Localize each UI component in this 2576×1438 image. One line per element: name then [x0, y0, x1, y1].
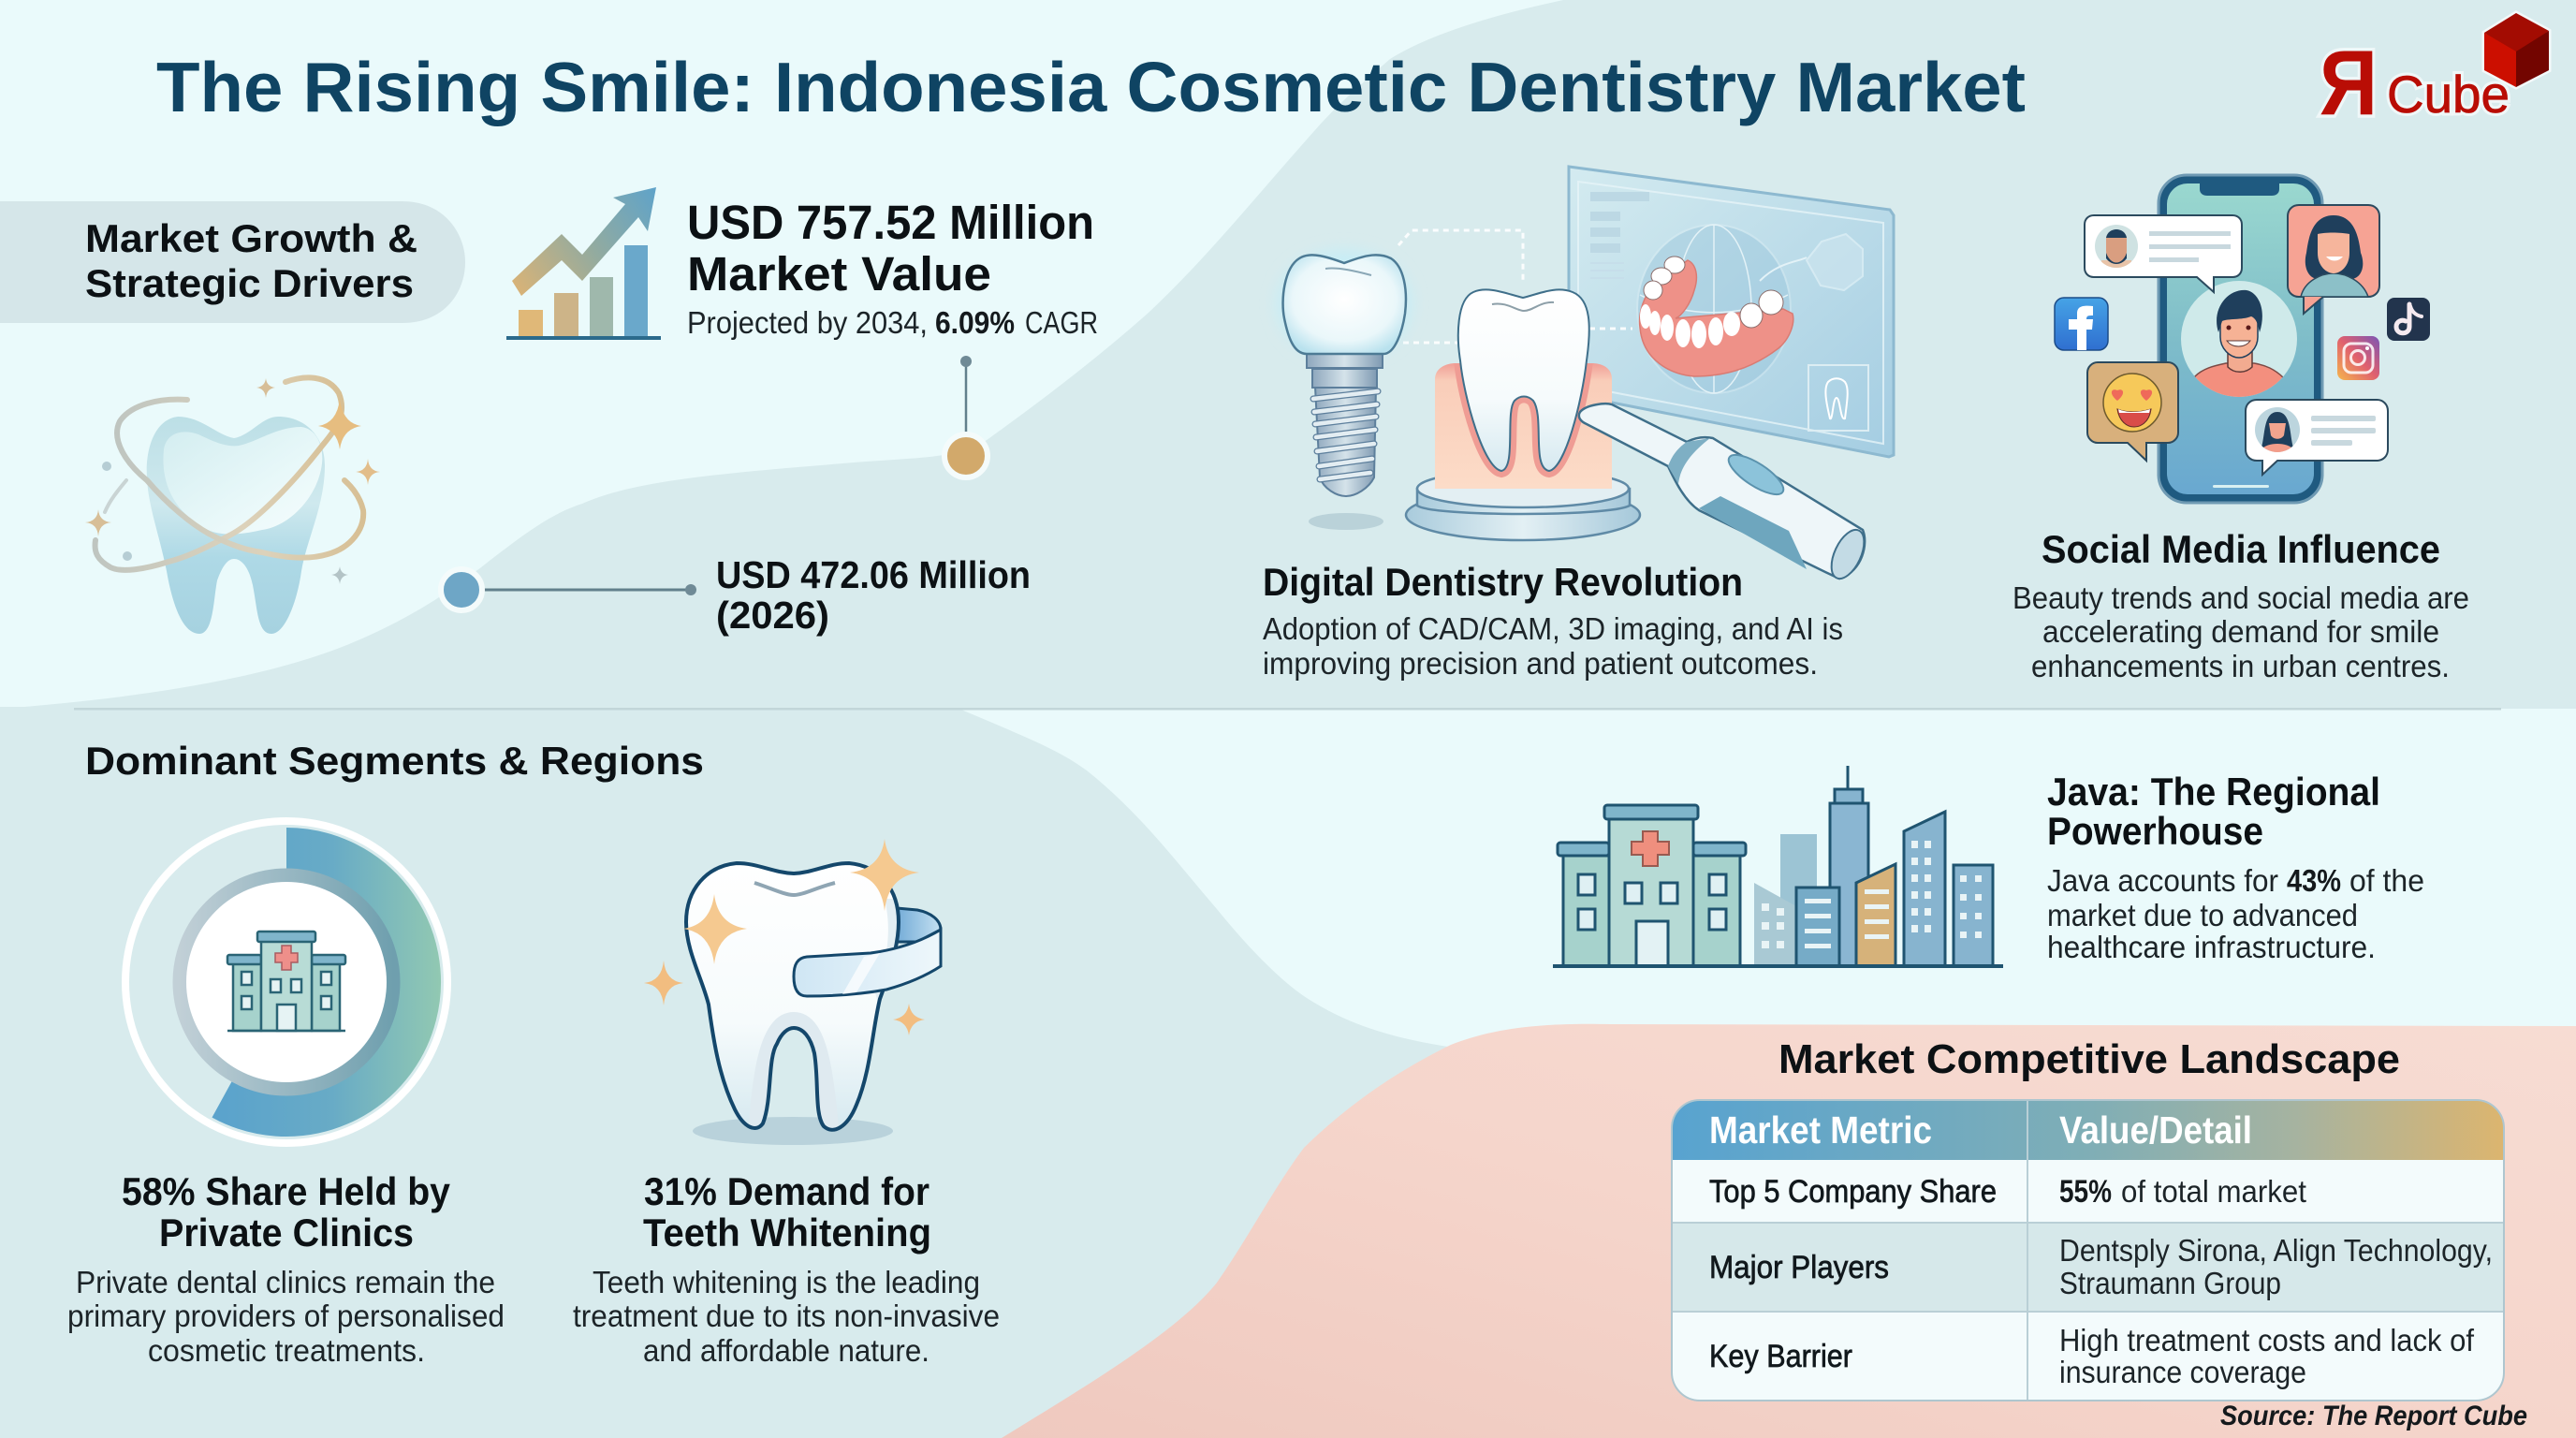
heading: java the regional powerhouse: Powerhouse [2047, 809, 2263, 853]
heading: digital dentistry revolution: Digital Dentistry Revolution [1263, 560, 1743, 604]
heading pill: market growth and strategic drivers: Strategic Drivers [85, 261, 414, 305]
text: java description: 43% [2287, 863, 2341, 898]
text: java description [2047, 863, 2424, 964]
panel: digital dentistry revolution [1263, 167, 1894, 681]
text: digital dentistry description: Adoption of CAD/CAM, 3D imaging, and AI is [1263, 611, 1843, 646]
chat bubble: man [2085, 215, 2242, 292]
connector: 2034 marker [944, 356, 988, 477]
panel: java regional powerhouse [1553, 766, 2424, 966]
icon: growth bar chart with arrow [506, 187, 661, 340]
panel: social media influence [2012, 175, 2469, 683]
row: major players: Dentsply Sirona, Align Technology, [2059, 1233, 2493, 1268]
icon: hospital [227, 932, 345, 1031]
table header: Value/Detail [2059, 1108, 2252, 1152]
stat heading: 58 percent share: 58% Share Held by [122, 1169, 451, 1213]
panel: private clinics share [67, 821, 505, 1368]
logo: RCube [2320, 13, 2549, 134]
text: java description: Java accounts for [2047, 863, 2278, 898]
panel: market growth and value [0, 187, 1098, 637]
text: private clinics description: primary providers of personalised [67, 1299, 505, 1333]
row: key barrier: Key Barrier [1709, 1339, 1852, 1374]
chat bubble: heart eyes emoji [2087, 362, 2178, 461]
heading: social media influence: Social Media Influence [2042, 527, 2440, 571]
stat: USD 757.52 million market value: 6.09% [935, 305, 1015, 340]
text: teeth whitening description: treatment due to its non-invasive [573, 1299, 1000, 1333]
panel: market competitive landscape [1672, 1036, 2504, 1401]
text: teeth whitening description: and affordable nature. [643, 1333, 929, 1368]
stat heading: 31 percent demand: Teeth Whitening [643, 1211, 931, 1255]
table header [1709, 1108, 2252, 1152]
row: key barrier: High treatment costs and lack of [2059, 1323, 2475, 1357]
avatar: smiling man [2181, 281, 2297, 403]
stat: USD 472.06 million 2026: (2026) [716, 594, 829, 637]
row: key barrier [1709, 1323, 2475, 1389]
stat: USD 757.52 million market value: Projected by 2034, [687, 305, 928, 340]
stat heading: 58 percent share [122, 1169, 451, 1255]
text: digital dentistry description [1263, 611, 1843, 681]
icon: facebook [2055, 298, 2108, 350]
text: social media description: enhancements in urban centres. [2031, 649, 2450, 683]
phone [2159, 175, 2322, 503]
heading pill: market growth and strategic drivers: Market Growth & [85, 216, 417, 260]
text: social media description [2012, 580, 2469, 683]
panel: teeth whitening demand [573, 839, 1000, 1368]
row: major players: Straumann Group [2059, 1266, 2281, 1300]
text: private clinics description: cosmetic treatments. [148, 1333, 425, 1368]
row: top 5 company share: 55% [2059, 1174, 2112, 1210]
text: social media description: Beauty trends and social media are [2012, 580, 2469, 615]
text: teeth whitening description: Teeth whitening is the leading [593, 1265, 980, 1299]
implant [1277, 250, 1412, 530]
heading: java the regional powerhouse [2047, 770, 2380, 853]
heading: market competitive landscape: Market Competitive Landscape [1778, 1036, 2400, 1082]
stat: USD 472.06 million 2026 [716, 553, 1031, 637]
logo: RCube: Cube [2387, 65, 2510, 124]
screen with dental scan [1569, 167, 1894, 457]
connector: 2026 marker [441, 569, 696, 610]
stat: USD 757.52 million market value: CAGR [1025, 305, 1098, 340]
row: major players: Major Players [1709, 1250, 1889, 1285]
chat bubble: woman card [2288, 205, 2379, 314]
icon: hospital and city skyline [1553, 766, 2003, 966]
table: market metrics [1672, 1100, 2504, 1401]
text: java description: market due to advanced [2047, 898, 2358, 932]
heading pill: market growth and strategic drivers [0, 201, 465, 323]
logo: RCube: Я [2320, 31, 2378, 134]
heading: java the regional powerhouse: Java: The Regional [2047, 770, 2380, 814]
stat: USD 757.52 million market value [687, 196, 1098, 340]
text: digital dentistry description: improving precision and patient outcomes. [1263, 646, 1818, 681]
text: java description: healthcare infrastructure. [2047, 930, 2376, 964]
illustration: phone with social media [2055, 175, 2430, 503]
tooth on platform [1406, 289, 1640, 540]
stat heading: 31 percent demand: 31% Demand for [644, 1169, 929, 1213]
logo: RCube: Cube [2387, 65, 2510, 124]
text: private clinics description [67, 1265, 505, 1368]
row: key barrier: insurance coverage [2059, 1355, 2306, 1389]
row: major players [1709, 1233, 2493, 1300]
row: top 5 company share: of total market [2121, 1174, 2306, 1209]
text: java description: of the [2349, 863, 2424, 898]
title: The Rising Smile: Indonesia Cosmetic Dentistry Market [156, 48, 2026, 126]
icon: instagram [2337, 336, 2379, 380]
source credit: Source: The Report Cube [2220, 1401, 2527, 1431]
icon: tiktok [2387, 298, 2430, 341]
stat: USD 757.52 million market value: Market Value [687, 247, 991, 301]
text: social media description: accelerating demand for smile [2042, 614, 2439, 649]
table header: Market Metric [1709, 1108, 1932, 1152]
stat: USD 757.52 million market value: USD 757.52 Million [687, 196, 1094, 249]
stat heading: 58 percent share: Private Clinics [159, 1211, 414, 1255]
heading: dominant segments and regions: Dominant Segments & Regions [85, 739, 704, 783]
icon: tooth with whitening strip [644, 839, 941, 1145]
text: private clinics description: Private dental clinics remain the [76, 1265, 495, 1299]
text: teeth whitening description [573, 1265, 1000, 1368]
stat heading: 31 percent demand [643, 1169, 931, 1255]
chat bubble: woman [2246, 400, 2388, 475]
row: top 5 company share [1709, 1174, 2306, 1210]
row: top 5 company share: Top 5 Company Share [1709, 1174, 1997, 1210]
dotted connectors [1398, 230, 1632, 343]
icon: glowing tooth with orbit rings [85, 377, 380, 634]
logo: RCube: Я [2320, 31, 2378, 134]
illustration: digital dentistry scene [1277, 167, 1894, 583]
donut chart: 58 percent share [125, 821, 447, 1143]
stat: USD 472.06 million 2026: USD 472.06 Million [716, 553, 1031, 596]
intraoral scanner [1579, 404, 1871, 583]
